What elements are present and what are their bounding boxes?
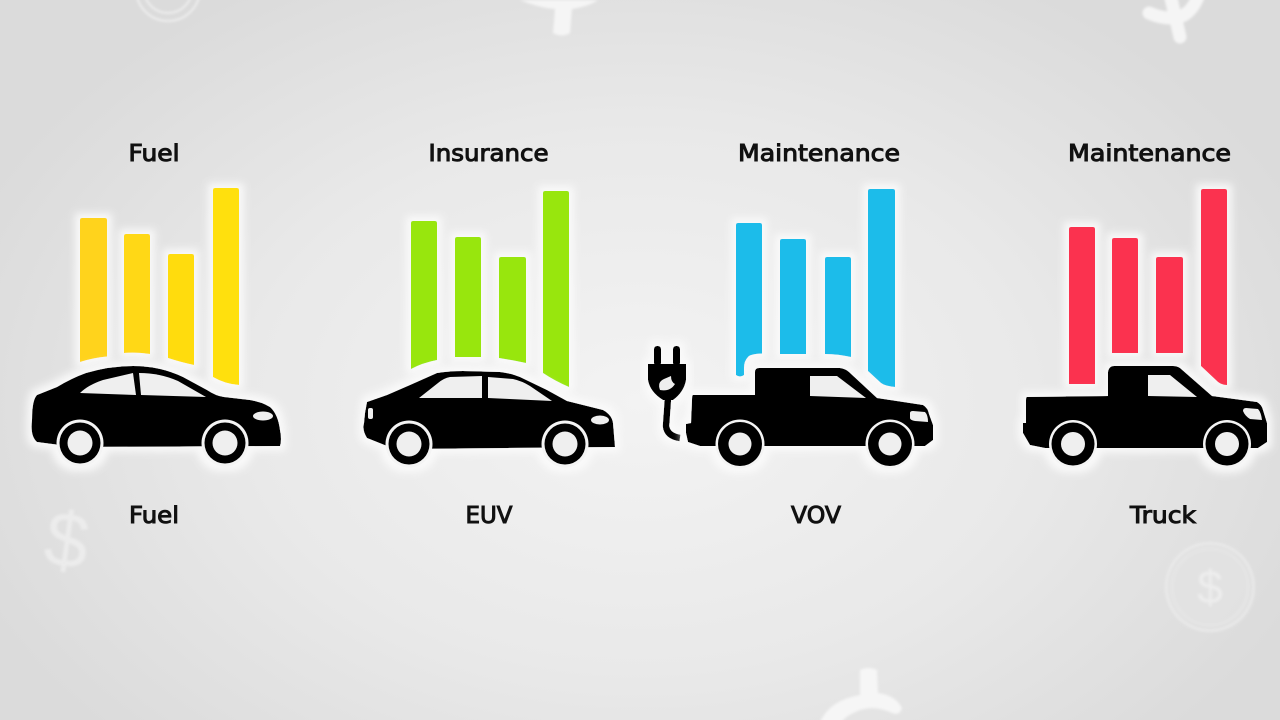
- label: Fuel: Fuel: [129, 503, 179, 529]
- icon: dollar left: $: [39, 493, 95, 587]
- panel: car 1 fuel: [32, 141, 281, 529]
- icon: coin top left: [136, 0, 200, 21]
- bar chart: blue: [736, 189, 895, 387]
- heading: Fuel: Fuel: [128, 141, 180, 167]
- heading: Insurance: Insurance: [428, 141, 548, 167]
- panel: car 2 insurance: [363, 141, 615, 529]
- label: VOV: VOV: [791, 503, 841, 529]
- label: Truck: Truck: [1129, 503, 1197, 529]
- panel: electric truck maintenance: [648, 141, 933, 529]
- icon: dollar bottom: [820, 668, 902, 720]
- heading: Maintenance: Maintenance: [738, 141, 900, 167]
- heading: Maintenance: Maintenance: [1068, 141, 1231, 167]
- panel: truck maintenance: [1023, 141, 1267, 529]
- bar chart: green: [411, 191, 569, 387]
- icon: sedan: [32, 366, 281, 466]
- icon: dollar top centre: [520, 0, 598, 36]
- bar chart: red: [1069, 189, 1227, 385]
- icon: pickup truck: [686, 368, 933, 468]
- icon: dollar top right: [1149, 0, 1199, 37]
- icon: coin right: $: [1197, 561, 1223, 613]
- bar chart: yellow: [80, 188, 239, 385]
- icon: pickup truck: [1023, 366, 1267, 468]
- icon: coin right: [1166, 543, 1254, 631]
- icon: sedan: [363, 371, 615, 468]
- label: EUV: EUV: [466, 503, 513, 529]
- icon: plug: [648, 346, 686, 438]
